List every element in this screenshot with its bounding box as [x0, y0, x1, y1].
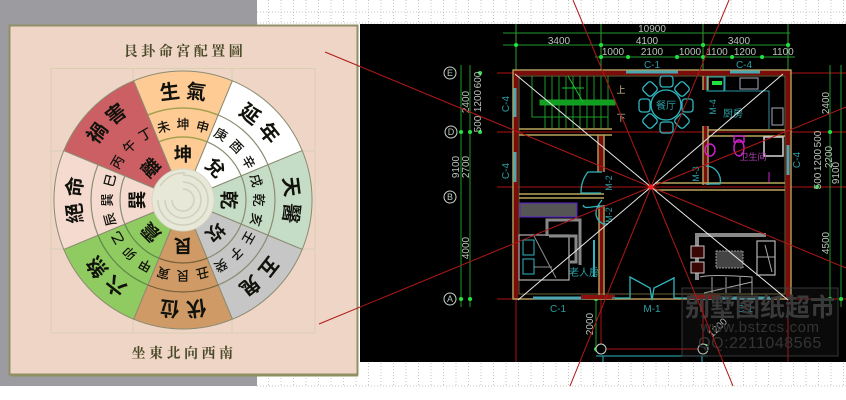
- dimension numbers: 2000: [585, 312, 596, 335]
- sector: 禍害: [57, 74, 218, 235]
- sector: 五鬼: 壬: [239, 228, 258, 247]
- sector: 伏位: 寅: [155, 264, 172, 282]
- icon: plan centre point: [648, 184, 654, 190]
- room and door labels: C-4: [736, 60, 752, 71]
- sector: 延年: 兌: [201, 154, 229, 182]
- sector: 絕命: 絕: [63, 202, 88, 225]
- room and door labels: 上: [616, 85, 626, 95]
- sector: 絕命: 巽: [127, 191, 148, 209]
- room and door labels: C-4: [501, 96, 512, 112]
- sector: 六煞: 六: [101, 270, 131, 301]
- room and door labels: M-2: [604, 207, 614, 223]
- dimension numbers: 2100: [641, 47, 664, 58]
- sector: 天醫: 亥: [247, 211, 265, 228]
- sector: 禍害: 離: [137, 154, 165, 182]
- watermark: [682, 288, 838, 356]
- axis bubbles: [444, 67, 708, 362]
- sector: 六煞: 震: [137, 218, 165, 246]
- sector: 五鬼: 坎: [201, 218, 229, 246]
- panel: bagua chart card: [10, 26, 358, 376]
- sector: 禍害: 午: [120, 137, 140, 157]
- axis bubbles: E: [447, 68, 453, 78]
- dimension numbers: 1000: [679, 47, 702, 58]
- sight lines: red rays through centre: [319, 0, 846, 386]
- axis bubbles: D: [448, 127, 455, 137]
- dimension numbers: 500: [813, 172, 824, 189]
- sector: 五鬼: 癸: [211, 256, 230, 275]
- sector: 伏位: 伏: [185, 295, 208, 321]
- dimension numbers: 9100: [831, 161, 842, 184]
- sector: 天醫: [183, 151, 312, 249]
- watermark: 别墅图纸超市: [685, 294, 835, 322]
- grey backdrop: [0, 0, 257, 386]
- bedroom furniture: [519, 203, 594, 280]
- title: 艮卦命宮配置圖: [124, 43, 246, 60]
- room and door labels: 卫生间: [739, 151, 767, 162]
- CAD floor plan panel: [360, 24, 846, 362]
- thick wall fill: [513, 70, 791, 299]
- dimension numbers: 1200: [473, 89, 484, 112]
- sector: 絕命: 巳: [101, 172, 119, 189]
- sector: 天醫: 天: [278, 176, 302, 198]
- axis bubbles: B: [447, 192, 453, 202]
- room and door labels: M-1: [643, 304, 661, 315]
- dimension numbers: 1100: [706, 47, 728, 58]
- sector: 天醫: 乾: [218, 191, 239, 210]
- dimension numbers: [451, 24, 842, 340]
- axis bubbles: A: [447, 294, 453, 304]
- sector: 延年: 庚: [211, 125, 230, 144]
- sector: 六煞: [57, 165, 218, 326]
- bathroom fixtures: [705, 136, 783, 182]
- sector: 天醫: 戌: [247, 172, 265, 189]
- dimension numbers: 2700: [461, 155, 472, 178]
- dimension numbers: 4100: [636, 36, 659, 47]
- dimension numbers: 500: [813, 130, 824, 147]
- sight lines: white diagonals: [515, 74, 788, 300]
- sector: 伏位: 丑: [194, 264, 211, 282]
- sector: 六煞: 煞: [82, 252, 113, 282]
- sector: 天醫: 乾: [251, 193, 266, 207]
- room and door labels: 厨房: [723, 107, 743, 120]
- room and door labels: M-4: [708, 99, 718, 115]
- sector: 絕命: 命: [62, 175, 88, 198]
- stairs: [532, 76, 615, 128]
- sector: 五鬼: 五: [253, 252, 283, 281]
- dimension numbers: 2400: [461, 90, 472, 113]
- dimension numbers: 600: [473, 71, 484, 88]
- door swings: [581, 166, 720, 300]
- watermark: QQ:2211048565: [698, 335, 822, 352]
- sector: 六煞: 乙: [108, 228, 127, 247]
- kitchen fixtures: [707, 76, 783, 129]
- sector: 生氣: [134, 71, 232, 200]
- chart guide grid: [51, 68, 315, 333]
- room and door labels: M-2: [604, 175, 614, 191]
- dimension numbers: 500: [473, 115, 484, 132]
- room and door labels: 餐厅: [656, 99, 676, 112]
- dimension numbers: 3400: [548, 36, 571, 47]
- sector: 五鬼: [148, 165, 309, 326]
- sector: 禍害: 丙: [108, 153, 127, 172]
- sector: 五鬼: 鬼: [235, 270, 265, 302]
- sector: 延年: 延: [235, 99, 265, 130]
- room and door labels: C-1: [644, 60, 660, 71]
- dimension numbers: 1200: [706, 316, 730, 340]
- sector: 伏位: 艮: [176, 268, 190, 283]
- dimension numbers: 1200: [813, 148, 824, 171]
- dimension numbers: 1000: [602, 47, 625, 58]
- dimension lines: [461, 33, 841, 352]
- axis lines: [497, 24, 846, 362]
- sector: 六煞: 卯: [120, 243, 140, 263]
- walls: [513, 70, 791, 299]
- dimension numbers: 1200: [734, 47, 757, 58]
- sector: 生氣: 氣: [185, 80, 208, 105]
- living room furniture: [691, 235, 775, 295]
- sector: 禍害: 禍: [82, 118, 113, 148]
- room and door labels: C-1: [737, 304, 753, 315]
- sector: 絕命: 辰: [101, 211, 119, 228]
- sector: 生氣: 生: [158, 80, 181, 105]
- room and door labels: [501, 60, 803, 315]
- sector: 生氣: 未: [155, 118, 172, 136]
- sector: 伏位: 位: [158, 295, 181, 321]
- sector: 生氣: 申: [194, 118, 211, 136]
- dimension numbers: 2400: [821, 91, 832, 114]
- wheel chart: [54, 71, 312, 329]
- room and door labels: 老人房: [569, 266, 599, 279]
- sector: 伏位: [134, 200, 232, 329]
- room and door labels: C-4: [501, 163, 512, 179]
- sector: 絕命: [54, 151, 183, 249]
- room and door labels: M-3: [691, 166, 701, 182]
- dimension numbers: 1100: [772, 47, 794, 58]
- sector: 六煞: 甲: [136, 256, 155, 275]
- sector: 延年: [148, 74, 309, 235]
- caption: 坐東北向西南: [132, 345, 236, 362]
- icon: central swirl hub: [152, 169, 214, 231]
- sector: 禍害: 丁: [136, 125, 155, 144]
- dimension numbers: 3400: [728, 36, 751, 47]
- windows: [515, 72, 788, 298]
- sector: 延年: 酉: [226, 137, 246, 157]
- dimension numbers: 10900: [638, 24, 666, 35]
- sector: 絕命: 巽: [100, 193, 115, 207]
- dimension numbers: 2200: [824, 145, 835, 168]
- watermark: www.bstzcs.com: [699, 319, 820, 336]
- sector: 生氣: 坤: [174, 144, 192, 165]
- room and door labels: C-4: [792, 152, 803, 168]
- dimension numbers: 4500: [821, 231, 832, 254]
- sector: 伏位: 艮: [173, 235, 192, 256]
- sector: 延年: 年: [253, 118, 284, 148]
- dimension numbers: 4000: [461, 236, 472, 259]
- sector: 五鬼: 子: [226, 243, 246, 263]
- sector: 延年: 辛: [239, 153, 258, 172]
- dimension numbers: 9100: [451, 155, 462, 178]
- room and door labels: 下: [616, 113, 626, 123]
- sector: 生氣: 坤: [176, 117, 190, 132]
- room and door labels: C-1: [550, 304, 566, 315]
- sector: 天醫: 醫: [278, 202, 303, 225]
- sector: 禍害: 害: [101, 98, 131, 130]
- dining table: [639, 76, 693, 133]
